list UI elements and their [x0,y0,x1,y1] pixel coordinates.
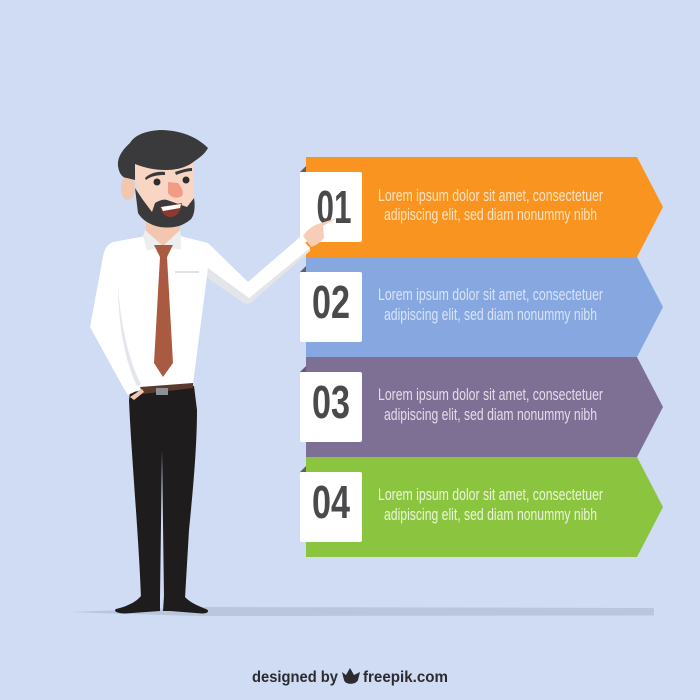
icon: freepik crown [342,668,360,684]
text: item 1 [378,186,603,224]
text: item 1: Lorem ipsum dolor sit amet, consectetuer [378,186,603,205]
card: number 03: 03 [312,376,350,428]
ground shadow [70,607,654,616]
belt [140,383,193,394]
collar [143,230,181,251]
belt buckle [156,388,168,395]
character: businessman [90,130,337,614]
neck [146,222,180,252]
text: item 3: Lorem ipsum dolor sit amet, consectetuer [378,385,603,404]
credit: designed by freepik.com [252,668,448,686]
text: item 2 [378,285,603,324]
hand in pocket [130,389,144,400]
shirt pocket [175,271,199,273]
nose [168,182,183,198]
arm shadow [206,247,310,304]
eyes [154,176,190,186]
text: item 3 [378,385,603,424]
text: item 3: adipiscing elit, sed diam nonummy nibh [384,405,597,424]
banner 4: green arrow [300,457,663,557]
hand pointing [303,218,337,247]
card: number 02 [300,272,362,342]
banner 1: orange arrow [300,157,663,257]
body shadow line [118,285,141,386]
banner 2: blue arrow [300,257,663,357]
text: item 4: Lorem ipsum dolor sit amet, consectetuer [378,485,603,504]
text: item 4: adipiscing elit, sed diam nonummy nibh [384,505,597,524]
shirt body and arms [90,236,310,395]
text: item 4 [378,485,603,524]
trousers [129,386,197,598]
banner 3: purple arrow [300,357,663,457]
card: number 02: 02 [312,276,350,328]
tie [154,245,173,377]
credit: designed by freepik.com: freepik.com [363,669,448,686]
hair [118,130,208,180]
text: item 2: adipiscing elit, sed diam nonummy nibh [384,305,597,324]
card: number 01 [300,172,362,242]
card: number 03 [300,372,362,442]
credit: designed by freepik.com: designed by [252,669,338,686]
left shoe [115,596,160,614]
card: number 04: 04 [312,476,350,528]
text: item 1: adipiscing elit, sed diam nonummy nibh [384,205,597,224]
ear [121,176,135,200]
face [135,160,194,224]
right shoe [163,596,208,614]
text: item 2: Lorem ipsum dolor sit amet, consectetuer [378,285,603,304]
mouth [160,203,182,217]
beard [135,188,195,227]
eyebrows [145,168,192,180]
card: number 01: 01 [316,181,352,233]
card: number 04 [300,472,362,542]
